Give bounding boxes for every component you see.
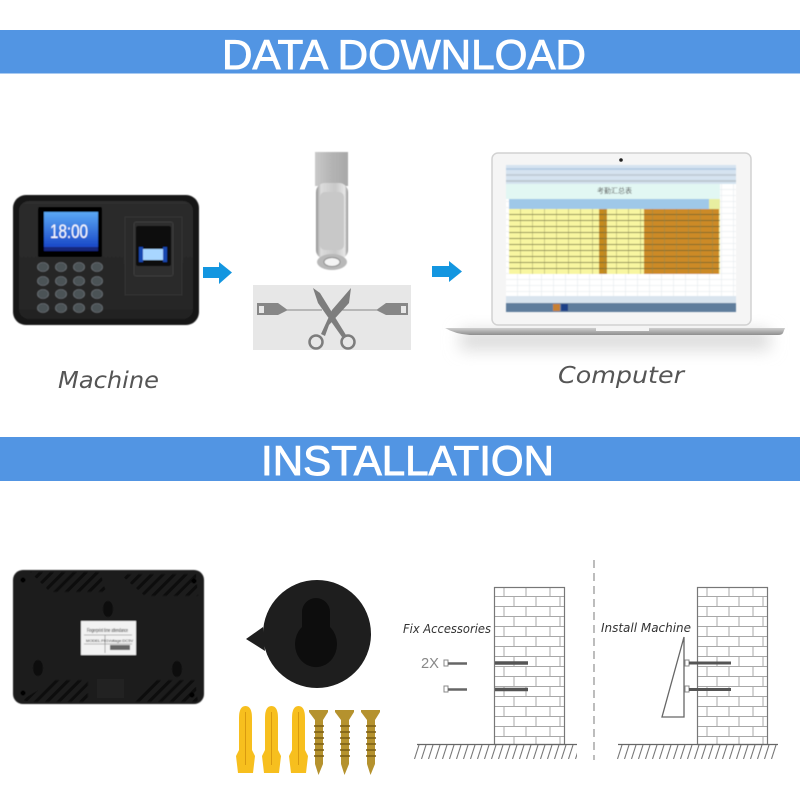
brick wall right <box>698 588 768 744</box>
dashed divider <box>593 560 595 760</box>
back panel label: Voltage:DC5V <box>108 638 133 643</box>
back panel label: MODEL:F01 <box>86 638 109 643</box>
loose anchors <box>444 660 467 692</box>
brick wall left <box>494 588 564 744</box>
heading band: data download <box>0 30 800 78</box>
heading band: data download: DATA DOWNLOAD <box>222 31 586 78</box>
label: fix accessories: Fix Accessories <box>403 622 491 636</box>
wall anchors left <box>495 663 528 690</box>
laptop screen spreadsheet: 考勤汇总表 <box>597 186 632 195</box>
yellow wall anchors <box>236 706 308 773</box>
cable right <box>338 303 408 315</box>
machine keypad <box>38 262 102 312</box>
arrow: machine to usb <box>203 262 232 284</box>
back panel label <box>81 621 136 655</box>
diagram: install machine <box>601 588 778 759</box>
machine back panel <box>13 570 204 704</box>
heading band: installation <box>0 437 800 484</box>
label: machine: Machine <box>58 368 159 394</box>
heading band: installation: INSTALLATION <box>261 437 554 484</box>
machine side profile <box>662 637 684 717</box>
usb flash drive <box>315 152 348 270</box>
wall bracket <box>246 580 371 688</box>
scissors <box>310 288 354 348</box>
laptop computer <box>445 153 785 350</box>
brass screws <box>309 710 380 775</box>
cut usb cable panel <box>253 285 411 350</box>
ground left <box>414 744 577 759</box>
fingerprint sensor <box>125 217 182 295</box>
label: 2X: 2X <box>421 655 439 672</box>
attendance machine front <box>13 195 199 325</box>
machine screen <box>38 207 102 257</box>
machine screen: 18:00 <box>50 222 88 243</box>
laptop screen spreadsheet <box>506 165 736 312</box>
ground right <box>616 744 778 759</box>
cable left <box>257 303 322 315</box>
back panel label: Fingerprint time attendance <box>87 628 128 634</box>
label: computer: Computer <box>558 363 686 389</box>
arrow: usb to computer <box>432 261 462 282</box>
mounted anchors <box>685 660 731 692</box>
label: install machine: Install Machine <box>601 621 691 635</box>
laptop base <box>445 328 785 335</box>
diagram: fix accessories <box>403 588 577 759</box>
